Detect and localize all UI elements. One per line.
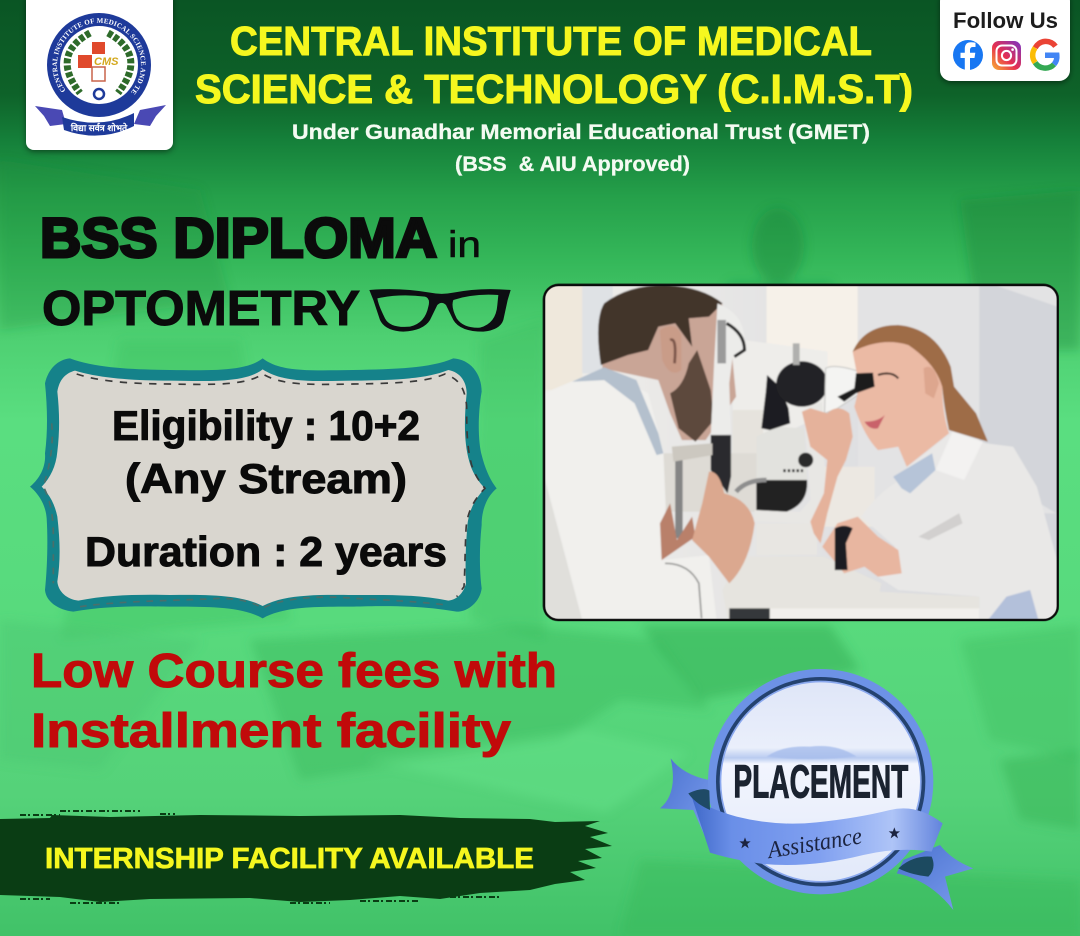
banner: internship facility [0, 811, 612, 903]
internship label: INTERNSHIP FACILITY AVAILABLE [45, 843, 534, 875]
panel: eligibility plaque [30, 358, 497, 618]
icon: instagram [992, 41, 1021, 70]
text block: course fees: Low Course fees with [31, 645, 557, 698]
room wall [540, 280, 1067, 627]
heading: institute name: SCIENCE & TECHNOLOGY (C.I.M.S.T) [195, 66, 913, 112]
ribbon band [692, 797, 943, 865]
assistance label: Assistance [764, 823, 864, 864]
eyepiece [837, 373, 875, 402]
text block: eligibility and duration: Duration : 2 years [85, 528, 447, 575]
badge ring [708, 669, 933, 894]
logo: institute emblem [35, 13, 166, 136]
heading: course title: OPTOMETRY [42, 282, 360, 336]
icon: eyeglasses [369, 289, 511, 332]
text block: course fees: Installment facility [31, 705, 511, 758]
badge: placement assistance [660, 669, 973, 910]
text block: eligibility and duration: (Any Stream) [125, 455, 407, 502]
slit lamp base and post [756, 510, 760, 512]
slit lamp body [758, 427, 794, 478]
heading: institute name [195, 18, 913, 112]
table [886, 594, 979, 608]
woman's ponytail and hair [853, 325, 988, 442]
brush stroke band [0, 815, 612, 902]
left ribbon tail [660, 758, 709, 847]
woman's raised arm and hand [802, 408, 853, 543]
heading: course title [40, 206, 481, 336]
text block: trust and approval: (BSS & AIU Approved) [455, 153, 690, 176]
right ribbon tail [897, 845, 973, 910]
logo: institute emblem: विद्या सर्वत्र शोभते [70, 122, 128, 133]
text block: eligibility and duration [85, 402, 447, 575]
plaque border [30, 358, 497, 618]
text block: trust and approval: Under Gunadhar Memorial Educational Trust (GMET) [292, 121, 870, 144]
woman's shirt [874, 442, 1056, 619]
icon: google [1033, 41, 1057, 68]
text block: trust and approval [292, 121, 870, 176]
man's head [602, 304, 737, 441]
plaque paper [42, 369, 485, 606]
panel: follow us card [940, 0, 1070, 81]
man's coat [554, 381, 716, 618]
panel: logo card [23, 0, 176, 155]
text block: eligibility and duration: Eligibility : 10+2 [112, 402, 420, 449]
man's hands [660, 503, 695, 560]
text block: course fees [31, 645, 557, 758]
follow us label: Follow Us [953, 8, 1058, 33]
heading: course title: in [448, 224, 481, 265]
photo: optometrist examining patient [540, 280, 1067, 627]
logo: institute emblem: CMS [94, 56, 119, 68]
woman's face and neck [853, 342, 949, 467]
heading: course title: BSS DIPLOMA [40, 206, 437, 269]
equipment backdrop [735, 342, 824, 432]
slit lamp chin rest [710, 302, 733, 433]
icon: facebook [953, 40, 983, 70]
assistance label [739, 823, 900, 864]
woman's lower hand and knob [822, 517, 902, 577]
placement label: PLACEMENT [733, 755, 908, 807]
heading: institute name: CENTRAL INSTITUTE OF MEDICAL [230, 18, 872, 64]
